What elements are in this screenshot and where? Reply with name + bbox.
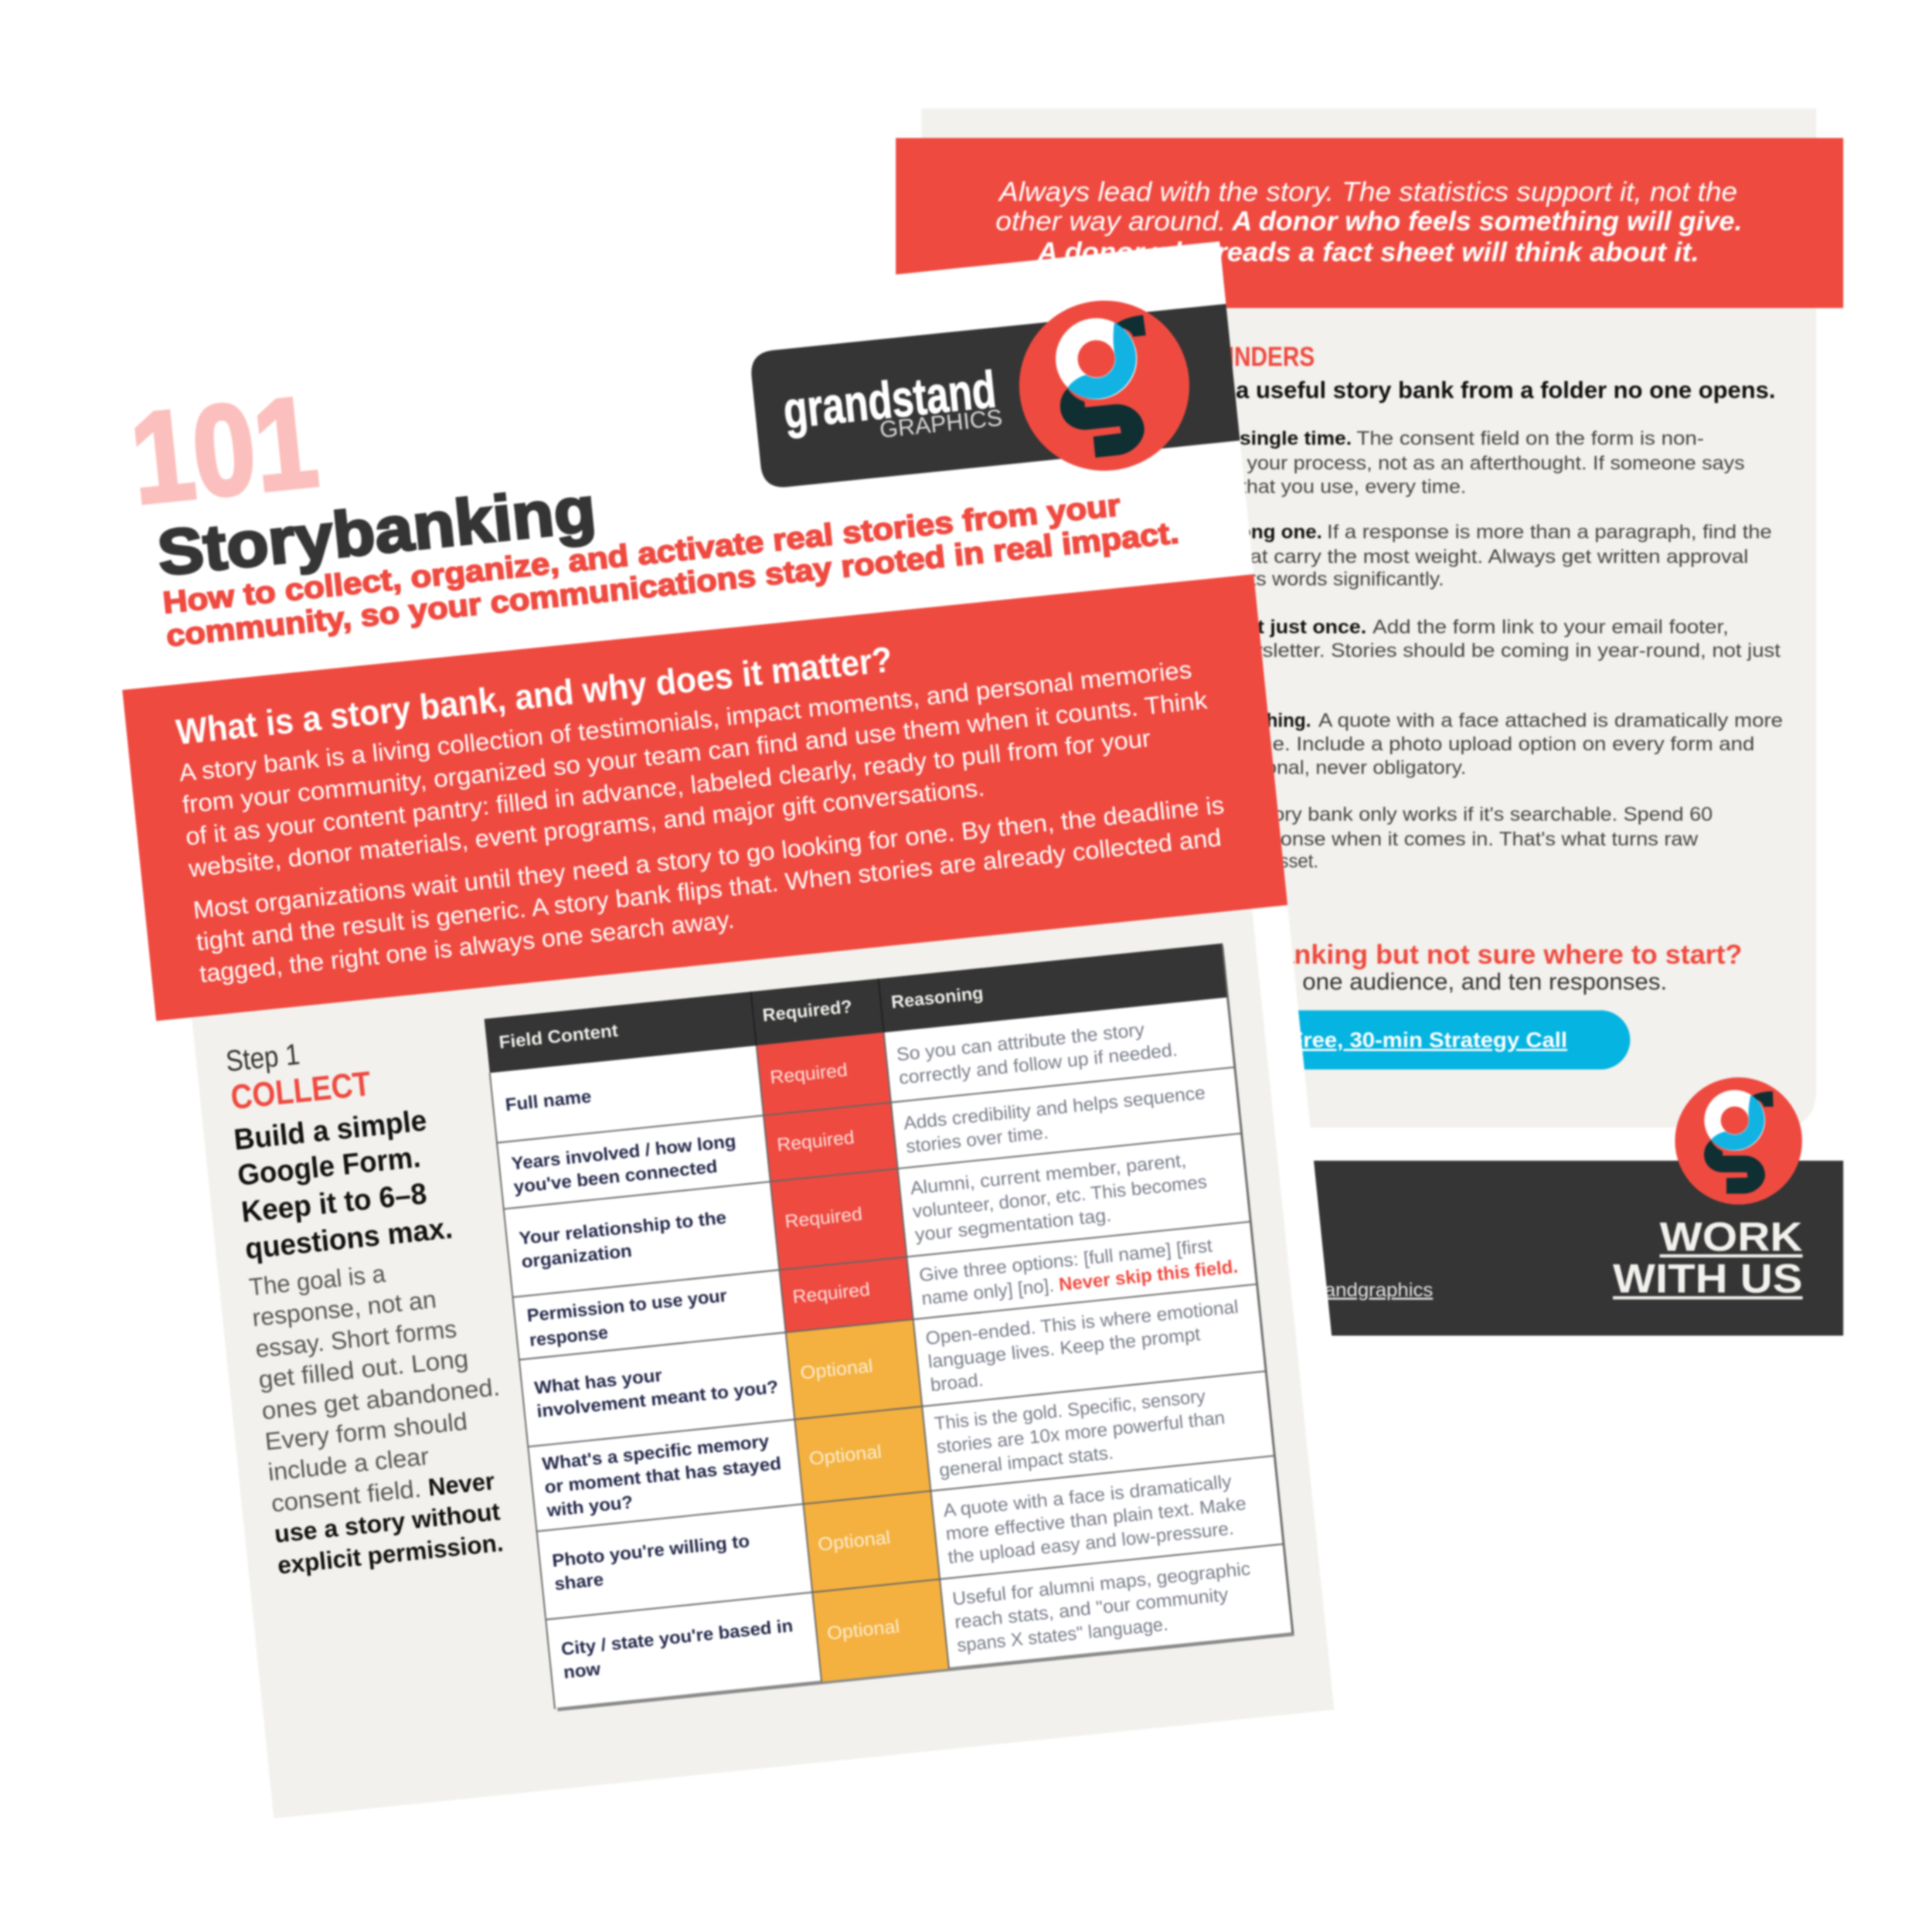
text block: reminder tips: your process, not as an afterthought. If someone says [1247, 453, 1745, 474]
text block: reminder tips: story bank only works if it's searchable. Spend 60 [1257, 804, 1713, 825]
panel: white page [82, 241, 1371, 1838]
text block: reminder tips: single time. [1240, 429, 1352, 450]
step description: Every form should [264, 1407, 468, 1455]
subtitle [162, 483, 1181, 653]
logo bar [749, 304, 1240, 489]
subheading: a useful story bank from a folder no one opens. [1236, 378, 1776, 403]
reasoning text [896, 1012, 1274, 1656]
footer bar: WITH US [1613, 1257, 1803, 1302]
logo bar: grandstand [781, 360, 998, 440]
call to action heading: storybanking but not sure where to start? [1194, 940, 1742, 970]
body copy [177, 654, 1232, 988]
field names: Full name [505, 1086, 592, 1114]
optional labels: Optional [817, 1527, 892, 1556]
reasoning text: the upload easy and low-pressure. [947, 1518, 1235, 1568]
logo bar: GRAPHICS [879, 405, 1004, 443]
step description: essay. Short forms [254, 1315, 458, 1363]
field names: Your relationship to the [518, 1207, 727, 1248]
step description: response, not an [251, 1285, 437, 1332]
quote banner: A donor who feels something will give. [1231, 206, 1742, 236]
icon: large g logo [1011, 292, 1198, 479]
table: form fields [485, 944, 1294, 1712]
footer bar [1232, 1161, 1843, 1335]
required column fills [757, 1032, 913, 1332]
field names: involvement meant to you? [536, 1376, 779, 1421]
panel: grey lower area [191, 903, 1334, 1818]
reasoning text: Adds credibility and helps sequence [903, 1083, 1206, 1134]
text block: reminder tips: A quote with a face attached is dramatically more [1318, 711, 1783, 732]
step description: The goal is a [248, 1260, 387, 1301]
step column: collect [224, 1021, 517, 1580]
body copy: of it as your content pantry: filled in advance, labeled clearly, ready to pull from for your [184, 724, 1152, 851]
text block: reminder tips: response when it comes in. That's what turns raw [1240, 829, 1698, 850]
table header: Required? [761, 996, 853, 1026]
text block: reminder tips: Add the form link to your email footer, [1372, 617, 1729, 638]
reasoning text: So you can attribute the story [896, 1019, 1145, 1066]
table header: Field Content [498, 1020, 619, 1053]
field names: share [553, 1569, 604, 1594]
text block: reminder tips: that carry the most weight. Always get written approval [1232, 547, 1748, 568]
field names: response [529, 1322, 609, 1350]
step headline: questions max. [243, 1212, 454, 1266]
optional labels: Optional [826, 1616, 900, 1645]
back sheet [896, 108, 1843, 1335]
body copy: website, donor materials, event programs, and major gift conversations. [187, 774, 986, 883]
field names: or moment that has stayed [543, 1453, 782, 1497]
field names: What has your [533, 1365, 663, 1398]
reasoning text: This is the gold. Specific, sensory [934, 1386, 1206, 1434]
step description: explicit permission. [276, 1529, 505, 1580]
optional labels [799, 1355, 900, 1645]
reasoning text: correctly and follow up if needed. [898, 1039, 1179, 1089]
step description: Never [427, 1467, 496, 1502]
field names: Permission to use your [526, 1285, 728, 1325]
field names: Years involved / how long [510, 1131, 736, 1174]
field names: Photo you're willing to [551, 1530, 750, 1570]
body copy: Most organizations wait until they need a story to go looking for one. By then, the deadline is [192, 791, 1226, 924]
step headline: Build a simple [233, 1104, 428, 1157]
field names: with you? [545, 1492, 634, 1521]
step description: get filled out. Long [257, 1345, 470, 1393]
call to action text: one audience, and ten responses. [1302, 969, 1667, 995]
body copy: tight and the result is generic. A story bank flips that. When stories are already collected and [195, 823, 1223, 956]
subtitle: community, so your communications stay rooted in real impact. [165, 515, 1181, 653]
reasoning text: Open-ended. This is where emotional [925, 1297, 1240, 1349]
text block: reminder tips: everything. [1211, 711, 1311, 732]
step description: include a clear [267, 1442, 430, 1486]
reasoning text: your segmentation tag. [914, 1205, 1112, 1246]
step label: Step 1 [224, 1038, 301, 1078]
required labels: Required [776, 1127, 855, 1156]
step description: use a story without [273, 1497, 502, 1548]
quote banner: other way around. [995, 206, 1226, 236]
step headline [233, 1103, 454, 1266]
reasoning text: A quote with a face is dramatically [942, 1471, 1233, 1522]
footer bar: grandstandgraphics [1258, 1280, 1433, 1301]
field names: now [563, 1658, 602, 1682]
text block: reminder tips: its words significantly. [1246, 569, 1444, 590]
front sheet [82, 241, 1371, 1838]
text block: reminder tips: optional, never obligatory. [1232, 757, 1466, 778]
panel: what is a story bank [122, 574, 1287, 1021]
field names: you've been connected [513, 1156, 718, 1197]
reasoning text: stories are 10x more powerful than [936, 1407, 1226, 1458]
button: strategy call [1171, 1010, 1630, 1070]
table header: Reasoning [890, 983, 985, 1012]
button: strategy call: Book a Free, 30-min Strategy Call [1207, 1028, 1567, 1052]
optional labels: Optional [799, 1355, 874, 1384]
text block: reminder tips: that you use, every time. [1241, 477, 1466, 498]
required labels: Required [769, 1060, 849, 1088]
reasoning text: volunteer, donor, etc. This becomes [912, 1172, 1208, 1223]
text block: reminder tips: not just once. [1232, 617, 1366, 638]
field names [504, 1070, 806, 1682]
text block: reminder tips: asset. [1269, 851, 1318, 872]
field names: organization [520, 1240, 633, 1271]
step description: ones get abandoned. [260, 1372, 501, 1425]
table grid lines [485, 944, 1293, 1709]
text block: reminder tips [1211, 429, 1783, 872]
required labels [769, 1060, 871, 1308]
reasoning text: Give three options: [full name] [first [918, 1236, 1213, 1286]
reasoning text: broad. [930, 1369, 985, 1396]
step headline: Keep it to 6–8 [240, 1177, 428, 1229]
text block: reminder tips: long one. [1233, 522, 1322, 543]
reasoning text: general impact stats. [938, 1443, 1114, 1481]
reasoning text: reach stats, and "our community [954, 1584, 1230, 1633]
required labels: Required [784, 1204, 863, 1233]
required labels: Required [791, 1279, 871, 1308]
body copy: from your community, organized so your team can find and use them when it counts. Think [181, 686, 1209, 818]
optional column fills [786, 1319, 949, 1682]
reasoning text: Useful for alumni maps, geographic [951, 1559, 1251, 1610]
section heading: What is a story bank, and why does it matter? [174, 639, 894, 752]
decorative number 101: 101 [125, 370, 323, 531]
step headline: Google Form. [236, 1141, 422, 1192]
icon: small g logo [1675, 1077, 1802, 1205]
reasoning text: more effective than plain text. Make [944, 1493, 1247, 1545]
text block: reminder tips: newsletter. Stories should be coming in year-round, not just [1223, 641, 1781, 662]
quote banner [896, 138, 1843, 308]
reasoning text: stories over time. [905, 1122, 1049, 1158]
reasoning text: Never skip this field. [1058, 1257, 1239, 1295]
field names: What's a specific memory [541, 1430, 770, 1474]
panel: back sheet background [922, 108, 1816, 1128]
quote banner: Always lead with the story. The statistics support it, not the [998, 177, 1737, 207]
reasoning text: Alumni, current member, parent, [910, 1150, 1187, 1199]
field names: City / state you're based in [560, 1615, 794, 1659]
step description [248, 1249, 517, 1580]
quote banner: A donor who reads a fact sheet will think about it. [1036, 237, 1699, 267]
body copy: tagged, the right one is always one search away. [199, 906, 736, 988]
subtitle: How to collect, organize, and activate real stories from your [162, 488, 1122, 621]
step name: COLLECT [229, 1065, 372, 1117]
reasoning text: spans X states" language. [956, 1614, 1169, 1656]
heading: reminders: REMINDERS [1177, 342, 1315, 372]
text block: reminder tips: The consent field on the form is non- [1356, 429, 1704, 450]
optional labels: Optional [808, 1441, 883, 1470]
footer bar: WORK [1660, 1214, 1803, 1260]
reasoning text: language lives. Keep the prompt [927, 1324, 1202, 1372]
title: Storybanking [155, 473, 599, 589]
reasoning text: name only] [no]. [920, 1275, 1055, 1309]
step description: consent field. [270, 1475, 422, 1517]
text block: reminder tips: If a response is more than a paragraph, find the [1327, 522, 1772, 543]
table header [485, 944, 1228, 1073]
body copy: A story bank is a living collection of testimonials, impact moments, and personal memories [178, 655, 1193, 787]
text block: reminder tips: alone. Include a photo upload option on every form and [1232, 734, 1754, 755]
